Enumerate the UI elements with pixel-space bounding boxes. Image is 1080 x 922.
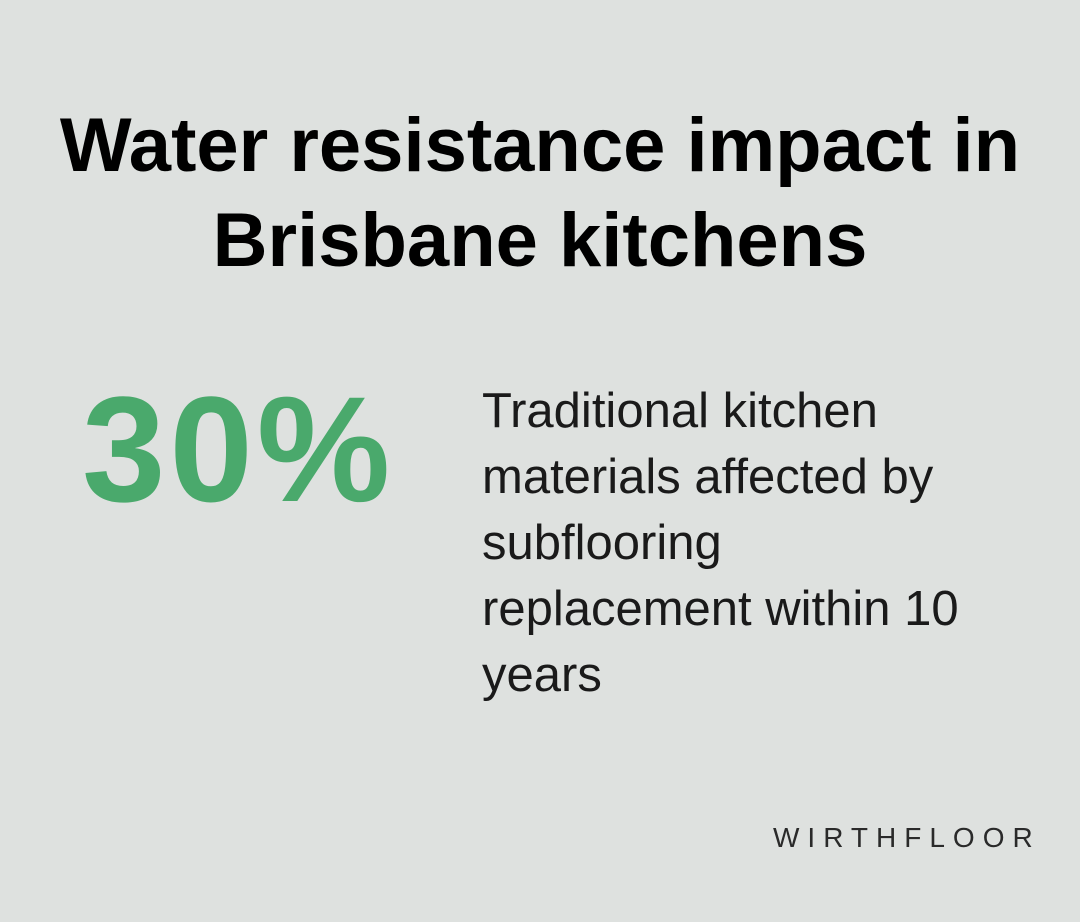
logo: WIRTHFLOOR	[773, 822, 1041, 853]
stat description: subflooring	[482, 516, 722, 570]
title: Brisbane kitchens	[213, 198, 867, 283]
stat number: 30%	[82, 365, 394, 533]
title: Water resistance impact in	[60, 103, 1020, 188]
title	[60, 103, 1020, 283]
stat description: years	[482, 648, 602, 702]
stat description	[482, 384, 959, 702]
stat description: materials affected by	[482, 450, 933, 504]
stat description: Traditional kitchen	[482, 384, 878, 438]
stat description: replacement within 10	[482, 582, 959, 636]
